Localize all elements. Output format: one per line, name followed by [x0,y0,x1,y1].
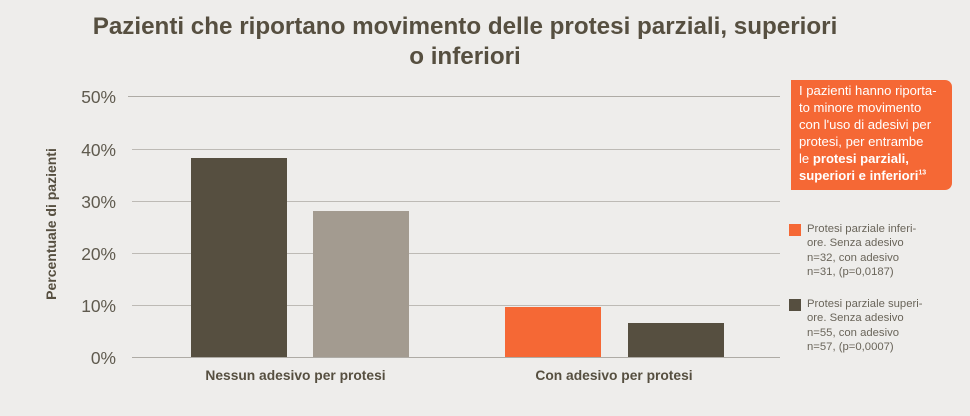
y axis labels: 10% [81,296,116,316]
y axis labels: 40% [81,140,116,160]
legend text inferiore: n=32, con adesivo [807,252,899,264]
legend text superiore [807,298,923,353]
y axis labels: 50% [81,87,116,107]
x axis labels: Nessun adesivo per protesi [205,368,386,383]
legend text inferiore: ore. Senza adesivo [807,237,904,249]
swatch orange [789,224,801,236]
legend text inferiore: n=31, (p=0,0187) [807,266,894,278]
legend text superiore: ore. Senza adesivo [807,312,904,324]
swatch brown [789,299,801,311]
legend text inferiore [807,223,916,278]
callout: protesi, per entrambe [799,134,923,149]
legend text superiore: n=57, (p=0,0007) [807,341,894,353]
y axis labels: 30% [81,192,116,212]
callout: con l'uso di adesivi per [799,117,931,132]
y axis labels: 0% [91,348,116,368]
legend: superiore [789,298,923,353]
legend: inferiore [789,223,916,278]
legend text superiore: Protesi parziale superi- [807,298,923,310]
callout: I pazienti hanno riporta- [799,83,937,98]
bars: nessun adesivo [191,158,409,357]
y axis title: Percentuale di pazienti [43,148,59,300]
title: o inferiori [409,43,521,70]
legend text superiore: n=55, con adesivo [807,327,899,339]
legend text inferiore: Protesi parziale inferi- [807,223,916,235]
callout: superiori e inferiori13 [799,168,926,183]
callout: to minore movimento [799,100,921,115]
callout [791,80,952,190]
callout: le protesi parziali, [799,151,909,166]
x axis labels: Con adesivo per protesi [535,368,693,383]
x axis labels [205,368,693,383]
title: Pazienti che riportano movimento delle protesi parziali, superiori [93,13,837,40]
y axis labels [81,87,116,368]
title [93,13,837,70]
y axis labels: 20% [81,244,116,264]
bars: con adesivo [505,307,724,357]
